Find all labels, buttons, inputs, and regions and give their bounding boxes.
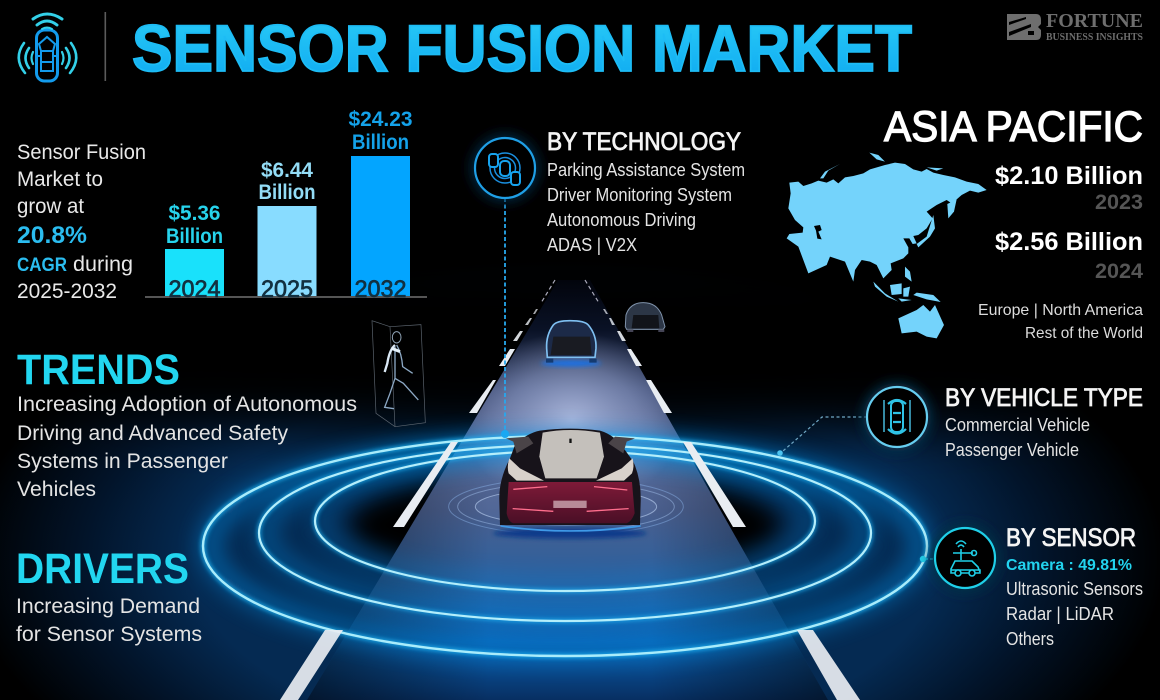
by technology text <box>547 128 745 255</box>
bar chart: market size: 2025 <box>261 276 313 303</box>
bar chart: market size: 2032 <box>354 276 406 303</box>
distant vehicle outline <box>625 303 665 332</box>
by technology text: Autonomous Driving <box>547 210 696 230</box>
CAGR summary text: Market to <box>17 168 103 191</box>
by vehicle type text: BY VEHICLE TYPE <box>945 384 1143 412</box>
trends block <box>17 346 357 501</box>
other regions <box>978 302 1143 342</box>
CAGR summary text <box>17 141 146 303</box>
pedestrian scan figure <box>372 321 425 427</box>
trends block: Vehicles <box>17 478 96 501</box>
regional values <box>995 162 1143 283</box>
bar chart: market size: $6.44 <box>261 159 313 182</box>
CAGR summary text: Sensor Fusion <box>17 141 146 164</box>
by sensor text: Ultrasonic Sensors <box>1006 579 1143 599</box>
by vehicle type text <box>945 384 1143 460</box>
by technology text: Parking Assistance System <box>547 160 745 180</box>
sensing rings around the car <box>203 436 927 656</box>
connector: sensor to ring <box>920 556 935 562</box>
regional heading: ASIA PACIFIC <box>884 103 1143 151</box>
title: SENSOR FUSION MARKET <box>132 11 912 85</box>
CAGR summary text: grow at <box>17 195 84 218</box>
main sports car rear view <box>449 429 683 539</box>
header logo icon: connected car <box>19 14 76 81</box>
bar chart: market size: $24.23 <box>348 108 412 131</box>
icon: vehicle type <box>863 383 931 451</box>
by sensor text: Others <box>1006 629 1054 649</box>
bar chart: market size: Billion <box>352 131 409 154</box>
CAGR summary text: during <box>73 253 133 276</box>
map: Asia Pacific <box>787 153 987 338</box>
by vehicle type text: Passenger Vehicle <box>945 440 1079 460</box>
bar chart: market size: $5.36 <box>168 202 220 225</box>
trends block: Systems in Passenger <box>17 450 228 473</box>
drivers block <box>16 545 202 646</box>
regional values: 2024 <box>1095 260 1143 283</box>
by technology text: ADAS | V2X <box>547 235 637 255</box>
road surface <box>307 280 828 700</box>
regional values: 2023 <box>1095 191 1143 214</box>
trends block: Driving and Advanced Safety <box>17 422 288 445</box>
by sensor text: Radar | LiDAR <box>1006 604 1114 624</box>
CAGR summary text: CAGR <box>17 255 67 276</box>
publisher logo: BUSINESS INSIGHTS <box>1046 32 1143 43</box>
publisher logo <box>1007 10 1143 43</box>
trends block: Increasing Adoption of Autonomous <box>17 393 357 416</box>
regional values: $2.56 Billion <box>995 228 1143 256</box>
CAGR summary text: 2025-2032 <box>17 280 117 303</box>
lead vehicle outline <box>541 321 601 367</box>
connector: technology to car <box>501 198 509 438</box>
drivers block: Increasing Demand <box>16 595 200 618</box>
header divider <box>104 12 106 81</box>
publisher logo: FORTUNE <box>1046 10 1143 32</box>
bar chart: market size: 2024 <box>168 276 220 303</box>
by vehicle type text: Commercial Vehicle <box>945 415 1090 435</box>
other regions: Rest of the World <box>1025 325 1143 342</box>
drivers block: DRIVERS <box>16 545 189 593</box>
bar chart: market size: Billion <box>258 181 316 204</box>
by technology text: BY TECHNOLOGY <box>547 128 741 156</box>
CAGR summary text: 20.8% <box>17 222 87 249</box>
drivers block: for Sensor Systems <box>16 623 202 646</box>
bar chart: market size <box>145 108 427 303</box>
road lane markings <box>280 280 860 700</box>
by sensor text: BY SENSOR <box>1006 524 1136 552</box>
by technology text: Driver Monitoring System <box>547 185 732 205</box>
icon: technology <box>471 134 539 202</box>
by sensor text <box>1006 524 1143 649</box>
by sensor text: Camera : 49.81% <box>1006 557 1132 574</box>
regional values: $2.10 Billion <box>995 162 1143 190</box>
trends block: TRENDS <box>17 346 180 394</box>
connector: vehicle type to ring <box>777 417 867 456</box>
bar chart: market size: Billion <box>166 225 223 248</box>
other regions: Europe | North America <box>978 302 1143 319</box>
icon: sensor <box>931 524 999 592</box>
